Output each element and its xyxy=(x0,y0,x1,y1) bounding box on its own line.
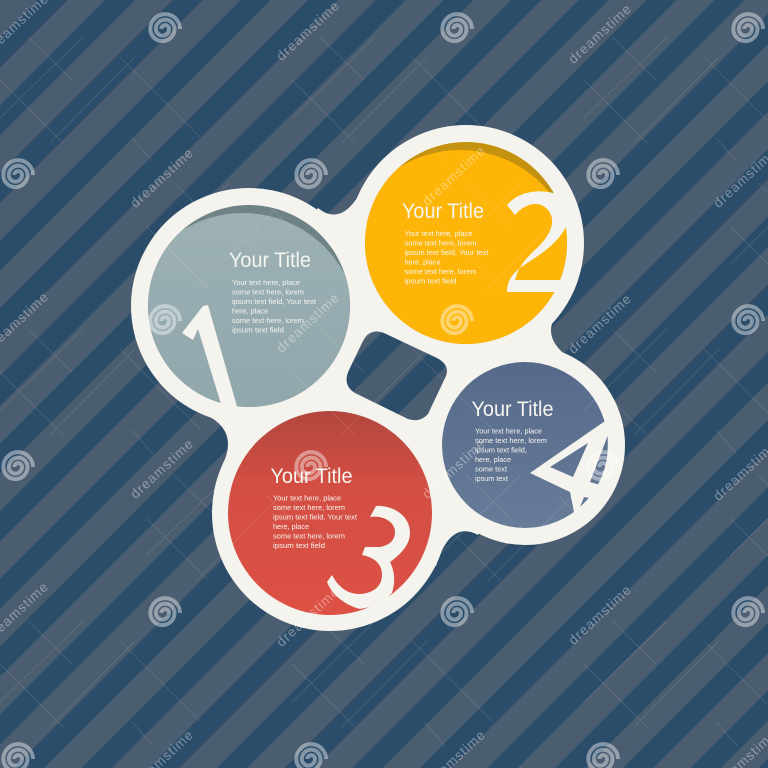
body text xyxy=(232,278,317,334)
body text xyxy=(404,229,489,286)
watermark dreamstime text: dreamstime xyxy=(419,143,488,209)
body text: here, place xyxy=(404,258,440,266)
panel: step 1 xyxy=(148,205,350,407)
number 2 xyxy=(507,191,575,292)
watermark dreamstime text: dreamstime xyxy=(127,436,196,502)
body text: some text here, lorem xyxy=(273,503,345,512)
body text: ipsum text field xyxy=(404,276,456,286)
watermark dreamstime text: dreamstime xyxy=(127,145,196,211)
title: Your Title xyxy=(472,398,554,421)
body text: some text here, lorem xyxy=(232,316,304,325)
body text: here, place xyxy=(273,522,309,531)
body text: here, place xyxy=(475,455,511,464)
body text: Your text here, place xyxy=(273,494,341,502)
number 4 xyxy=(530,421,618,520)
watermark dreamstime text: dreamstime xyxy=(419,436,488,502)
body text: ipsum text field xyxy=(232,326,284,334)
panel: step 2 xyxy=(365,142,567,344)
centre cut-out of the frame xyxy=(347,332,447,420)
body text: Your text here, place xyxy=(475,426,542,436)
body text: some text here, lorem xyxy=(404,267,476,276)
body text: some text xyxy=(475,464,508,474)
title: Your Title xyxy=(402,200,484,223)
body text: some text here, lorem xyxy=(273,532,345,540)
cream frame joining the four circles xyxy=(131,125,625,631)
body text: ipsum text field xyxy=(273,541,325,550)
body text: some text here, lorem xyxy=(404,238,476,248)
watermark dreamstime text: dreamstime xyxy=(565,291,634,357)
body text xyxy=(475,426,547,483)
number 1 xyxy=(182,305,238,410)
body text: ipsum text xyxy=(475,474,509,483)
number 3 xyxy=(327,506,410,609)
panel: step 3 xyxy=(228,411,432,615)
title: Your Title xyxy=(270,465,352,488)
body text xyxy=(273,494,358,550)
watermark dreamstime text: dreamstime xyxy=(273,584,342,650)
body text: here, place xyxy=(232,306,268,316)
body text: some text here, lorem xyxy=(475,436,547,445)
watermark dreamstime text: dreamstime xyxy=(273,290,342,356)
body text: ipsum text field, Your text xyxy=(232,297,317,306)
body text: ipsum text field, Your text xyxy=(404,248,489,257)
panel: step 4 xyxy=(442,362,618,528)
title: Your Title xyxy=(229,249,311,272)
body text: ipsum text field, xyxy=(475,446,527,454)
body text: some text here, lorem xyxy=(232,288,304,296)
body text: Your text here, place xyxy=(232,278,300,287)
body text: ipsum text field, Your text xyxy=(273,512,358,522)
body text: Your text here, place xyxy=(404,229,472,238)
watermark dreamstime text: dreamstime xyxy=(565,582,634,648)
watermark dreamstime text: dreamstime xyxy=(565,1,634,67)
